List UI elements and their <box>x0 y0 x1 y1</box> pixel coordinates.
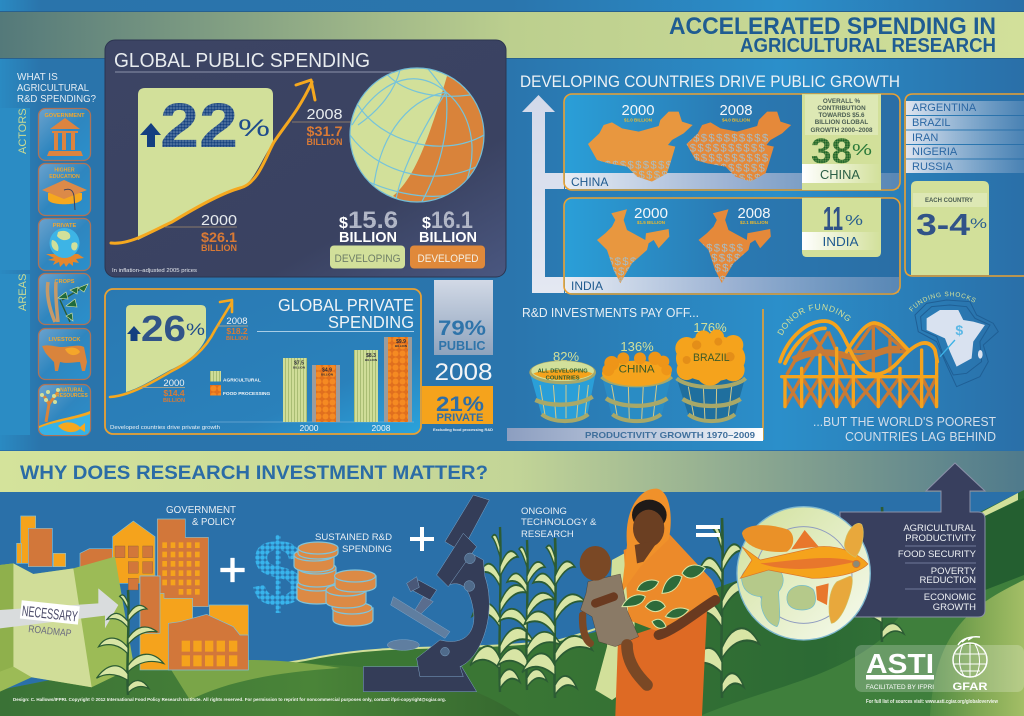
icon: natural resources: RESOURCES <box>56 393 88 399</box>
basket: all developing countries: COUNTRIES <box>546 375 580 381</box>
map: china 2008: $$$$$$$$$$$ <box>685 153 769 165</box>
growth card <box>138 88 273 240</box>
basket: brazil <box>675 320 746 422</box>
map: africa funding shocks <box>909 292 999 387</box>
labels: china 2000: 2000 <box>622 102 654 119</box>
card: each country <box>911 181 989 275</box>
panel: outcomes arrow <box>840 463 985 617</box>
label: productivity growth <box>507 428 763 441</box>
outcomes list <box>898 523 977 613</box>
icon: higher education: EDUCATION <box>49 174 80 180</box>
label: ongoing technology and research: TECHNOLOGY & <box>521 517 597 528</box>
country list: IRAN <box>912 132 938 144</box>
bar chart: $4.9 <box>322 368 332 374</box>
country list: ARGENTINA <box>912 102 977 114</box>
illustration: dollar and coins: $ <box>252 520 304 627</box>
panel: global public spending <box>105 40 506 277</box>
panel: other countries <box>905 94 1024 276</box>
share: private 21% <box>422 386 493 424</box>
actors sidebar <box>0 108 30 270</box>
growth curve arrow <box>110 300 232 397</box>
label: government and policy: GOVERNMENT <box>166 505 236 516</box>
big stat: 26%: 26 <box>141 308 186 349</box>
share: private 21%: 21% <box>436 393 484 416</box>
card: china contribution: OVERALL % <box>823 98 861 105</box>
outcomes list: PRODUCTIVITY <box>905 533 977 544</box>
icon: crops <box>38 274 90 324</box>
areas sidebar: AREAS <box>17 274 29 311</box>
heading: R&D investments pay off: R&D INVESTMENTS PAY OFF... <box>522 306 699 320</box>
map: china 2000: $$$$$$$$$$ <box>600 169 677 181</box>
label: india band: INDIA <box>571 279 603 293</box>
bar chart: 2008 <box>372 423 391 433</box>
label: productivity growth: PRODUCTIVITY GROWTH 1970–2009 <box>585 430 755 440</box>
card: each country: EACH COUNTRY <box>925 198 973 204</box>
label: 2000 value <box>165 212 237 253</box>
corn plant: by microscope <box>470 527 534 692</box>
legend: FOOD PROCESSING <box>223 391 270 397</box>
roller coaster: donor funding <box>777 304 940 408</box>
caption: poorest countries <box>813 415 996 444</box>
stat: developed 16.1 billion: BILLION <box>419 229 477 246</box>
label: 2000 value: 2000 <box>201 212 237 229</box>
map: india 2008 <box>698 209 771 286</box>
map: china 2008: $$$$$$$$$$$ <box>685 133 769 145</box>
basket: all developing countries: ALL DEVELOPING <box>538 369 588 375</box>
card: china contribution: CHINA <box>820 168 861 182</box>
illustration: plate of food <box>737 507 870 640</box>
map: india 2000: $$$$ <box>607 256 638 268</box>
heading: global private spending <box>278 295 414 332</box>
plus sign <box>410 527 434 551</box>
basket: all developing countries: 82% <box>553 349 579 364</box>
label: 2008 value <box>217 316 248 342</box>
left intro question: WHAT IS <box>17 72 58 83</box>
outcomes list: AGRICULTURAL <box>903 523 976 534</box>
map: china 2008: $$$$$$$$$$$ <box>685 173 769 185</box>
heading: why: WHY DOES RESEARCH INVESTMENT MATTER? <box>20 463 488 484</box>
labels: india 2000: 2000 <box>634 205 668 222</box>
map: india 2008: $$$$$$ <box>703 253 749 265</box>
areas sidebar <box>0 274 30 435</box>
actors sidebar: ACTORS <box>17 108 29 154</box>
stat: developing 15.6 billion <box>330 207 405 268</box>
icon: government <box>38 108 90 160</box>
country list <box>906 101 1024 173</box>
label: 2008 value: 2008 <box>306 106 342 123</box>
big stat: 38%: 38 <box>811 132 852 171</box>
stat: developed 16.1 billion <box>410 207 485 268</box>
bar chart: $8.3 <box>366 353 376 359</box>
labels: india 2008: 2008 <box>738 205 770 222</box>
outcomes list: GROWTH <box>933 602 976 613</box>
map: china 2000: $$$$$$$$$$ <box>597 159 673 171</box>
label: sustained R&D spending: SPENDING <box>342 544 392 555</box>
label: sustained R&D spending <box>315 532 392 555</box>
corn plant: behind panel <box>849 507 919 642</box>
bar chart: $9.9 <box>396 339 406 345</box>
card: india contribution: % <box>845 212 863 229</box>
big stat: 22%: 22 <box>160 91 238 161</box>
country list: BRAZIL <box>912 117 951 129</box>
bar chart: BILLION <box>395 344 407 348</box>
label: 2008 value: BILLION <box>306 137 342 147</box>
heading: developing countries drive public growth: DEVELOPING COUNTRIES DRIVE PUBLIC GROWTH <box>520 73 900 91</box>
panel: global private spending <box>105 289 421 434</box>
share: public 79%: 79% <box>438 317 486 340</box>
corn plant: right of woman <box>689 518 759 698</box>
sources note: For full list of sources visit: www.asti.cgiar.org/globaloverview <box>866 699 998 705</box>
card: each country: % <box>970 215 987 231</box>
panel: india <box>564 198 900 294</box>
map: africa funding shocks: $ <box>955 322 963 338</box>
outcomes list: FOOD SECURITY <box>898 549 977 560</box>
country list: RUSSIA <box>912 161 954 173</box>
icon: livestock <box>38 328 90 380</box>
bar chart: BILLION <box>321 372 333 376</box>
outcomes list: POVERTY <box>931 566 977 577</box>
big stat: 38%: % <box>852 142 872 159</box>
card: china contribution: GROWTH 2000–2008 <box>811 127 873 134</box>
logo: GFAR <box>952 637 988 693</box>
map: china 2008 <box>682 112 791 185</box>
big stat: 26%: % <box>186 320 205 339</box>
illustration: woman and child <box>580 489 719 716</box>
basket: china <box>602 339 672 422</box>
label: china band: CHINA <box>571 175 608 189</box>
heading: global private spending: GLOBAL PRIVATE <box>278 295 414 315</box>
logo: ASTI <box>866 648 934 691</box>
basket: china: CHINA <box>619 364 656 376</box>
header band <box>0 12 1024 58</box>
label: 2000 value <box>142 378 185 404</box>
labels: china 2000: $1.0 BILLION <box>624 118 652 122</box>
left intro question: AGRICULTURAL <box>17 83 89 94</box>
map: india 2000: $$$$ <box>610 266 641 278</box>
heading: global private spending: SPENDING <box>328 312 414 332</box>
big stat: 38% <box>811 132 872 171</box>
stat: developed 16.1 billion: DEVELOPED <box>418 253 479 265</box>
section: why does research investment matter <box>0 450 1024 716</box>
label: ongoing technology and research: ONGOING <box>521 506 567 517</box>
label: 2008 value: $31.7 <box>306 123 343 139</box>
label: 2008 share: 2008 <box>434 359 492 386</box>
labels: china 2008: 2008 <box>720 102 752 119</box>
roadmap: ROADMAP <box>28 624 72 640</box>
roadmap <box>0 557 134 692</box>
left intro question <box>17 72 96 105</box>
icon: natural resources: NATURAL <box>60 388 84 394</box>
label: government and policy <box>166 505 236 528</box>
logos panel <box>855 637 1024 693</box>
map: india 2008: $$$$ <box>712 274 742 286</box>
label: 2000 value: BILLION <box>163 398 185 404</box>
card: each country: 3-4 <box>916 207 971 242</box>
roadmap: NECESSARY <box>21 604 79 626</box>
illustration: microscope <box>363 495 489 692</box>
card: china contribution: TOWARDS $5.6 <box>818 112 865 119</box>
icon: government: GOVERNMENT <box>44 113 85 119</box>
map: china 2000 <box>588 112 692 182</box>
heading: global public spending: GLOBAL PUBLIC SPENDING <box>114 50 370 72</box>
label: 2000 value: $14.4 <box>163 388 185 398</box>
equals sign <box>696 525 720 537</box>
growth curve arrow <box>111 80 315 243</box>
title: ACCELERATED SPENDING IN <box>669 13 996 40</box>
big stat: 22% <box>140 91 270 161</box>
map: china 2008: $$$$$$$$$$$ <box>682 143 766 155</box>
map: china 2000: $$$$$$$$$$ <box>597 179 673 191</box>
share: public 79%: PUBLIC <box>438 339 486 353</box>
outcomes list: REDUCTION <box>920 575 976 586</box>
icon: natural resources <box>38 384 90 436</box>
icon: private: PRIVATE <box>53 223 76 229</box>
plus sign <box>220 558 244 582</box>
footnote: In inflation–adjusted 2005 prices <box>112 268 197 274</box>
card: china contribution: CONTRIBUTION <box>817 105 866 112</box>
caption: poorest countries: ...BUT THE WORLD'S POOREST <box>813 415 996 429</box>
basket: brazil: BRAZIL <box>693 352 730 364</box>
label: 2008 value: 2008 <box>226 316 248 327</box>
label: 2000 value: BILLION <box>201 243 237 253</box>
landscape hills <box>0 490 1024 716</box>
label: ongoing technology and research: RESEARCH <box>521 529 574 540</box>
stat: developed 16.1 billion: 16.1 <box>431 207 473 234</box>
icon: higher education <box>38 164 90 216</box>
basket: brazil: 176% <box>693 320 727 335</box>
logo: ASTI: FACILITATED BY IFPRI <box>866 685 934 691</box>
title: AGRICULTURAL RESEARCH <box>740 35 996 57</box>
card: india contribution: INDIA <box>822 235 859 249</box>
share: private 21%: PRIVATE <box>436 412 484 424</box>
stat: developing 15.6 billion: 15.6 <box>348 207 398 234</box>
credits: Design: C. Hallows/IFPRI. Copyright © 2012 International Food Policy Research Institute. All rights reserved. For permission to reprint for noncommercial purposes only, contact ifpri-copyright@cgiar.org. <box>13 696 446 703</box>
map: india 2008: $$$$$$ <box>698 243 744 255</box>
big stat: 22%: % <box>238 115 270 142</box>
label: 2008 value: BILLION <box>226 336 248 342</box>
basket: all developing countries <box>529 349 596 421</box>
labels: india 2008: $2.1 BILLION <box>740 220 768 225</box>
logo: ASTI: ASTI <box>866 648 934 679</box>
label: sustained R&D spending: SUSTAINED R&D <box>315 532 392 543</box>
footnote: Developed countries drive private growth <box>110 425 220 431</box>
bar chart: BILLION <box>365 358 377 362</box>
share footnote: Excluding food processing R&D <box>433 427 493 432</box>
globe <box>350 60 484 205</box>
caption: poorest countries: COUNTRIES LAG BEHIND <box>845 430 996 444</box>
left intro question: R&D SPENDING? <box>17 94 96 105</box>
stat: developing 15.6 billion: $ <box>339 215 348 232</box>
card: china contribution <box>802 94 881 190</box>
card: china contribution: BILLION GLOBAL <box>815 119 868 126</box>
map: india 2000: $$$$ <box>610 276 641 288</box>
share: public 79% <box>434 280 493 355</box>
illustration: city buildings <box>17 516 248 670</box>
bar chart: 2000 <box>300 423 319 433</box>
label: donor funding: DONOR FUNDING <box>777 304 850 336</box>
title <box>669 13 996 57</box>
label: ongoing technology and research <box>521 506 597 540</box>
map: china 2008: $$$$$$$$$$$ <box>682 163 766 175</box>
label: funding shocks: FUNDING SHOCKS <box>909 292 976 312</box>
labels: china 2008: $4.0 BILLION <box>722 118 750 122</box>
icon: private <box>38 218 90 270</box>
arrow: growth axis <box>522 95 564 293</box>
corn plant: left of woman <box>497 540 561 690</box>
bar chart <box>210 337 414 433</box>
bar chart: $7.5 <box>294 360 304 366</box>
stat: developing 15.6 billion: DEVELOPING <box>334 253 400 265</box>
label: 2000 value: $26.1 <box>201 229 237 245</box>
country list: NIGERIA <box>912 146 958 158</box>
map: india 2008: $$$$$ <box>707 263 745 275</box>
outcomes list: ECONOMIC <box>924 592 976 603</box>
stat: developing 15.6 billion: BILLION <box>339 229 397 246</box>
label: government and policy: & POLICY <box>192 517 236 528</box>
card: india contribution: 11 <box>823 200 843 237</box>
legend: AGRICULTURAL <box>223 378 261 384</box>
basket: china: 136% <box>620 339 654 354</box>
bar chart: BILLION <box>293 366 305 370</box>
growth card <box>126 305 206 392</box>
stat: developed 16.1 billion: $ <box>422 215 431 232</box>
icon: higher education: HIGHER <box>54 168 75 174</box>
illustration: dollar and coins <box>252 520 376 627</box>
panel: china <box>564 94 900 191</box>
map: india 2000 <box>597 209 669 288</box>
label: 2000 value: 2000 <box>163 378 185 389</box>
icon: crops: CROPS <box>55 279 75 285</box>
icon: livestock: LIVESTOCK <box>49 337 80 343</box>
labels: india 2000: $1.5 BILLION <box>637 220 665 225</box>
label: 2008 value <box>292 106 352 147</box>
legend <box>210 371 270 397</box>
big stat: 26% <box>127 308 205 349</box>
corn plant: roadmap <box>96 590 164 695</box>
corn plant: left of woman 2 <box>522 538 592 698</box>
logo: GFAR: GFAR <box>952 681 988 693</box>
label: 2008 value: $18.2 <box>226 326 248 336</box>
card: india contribution <box>802 198 881 257</box>
